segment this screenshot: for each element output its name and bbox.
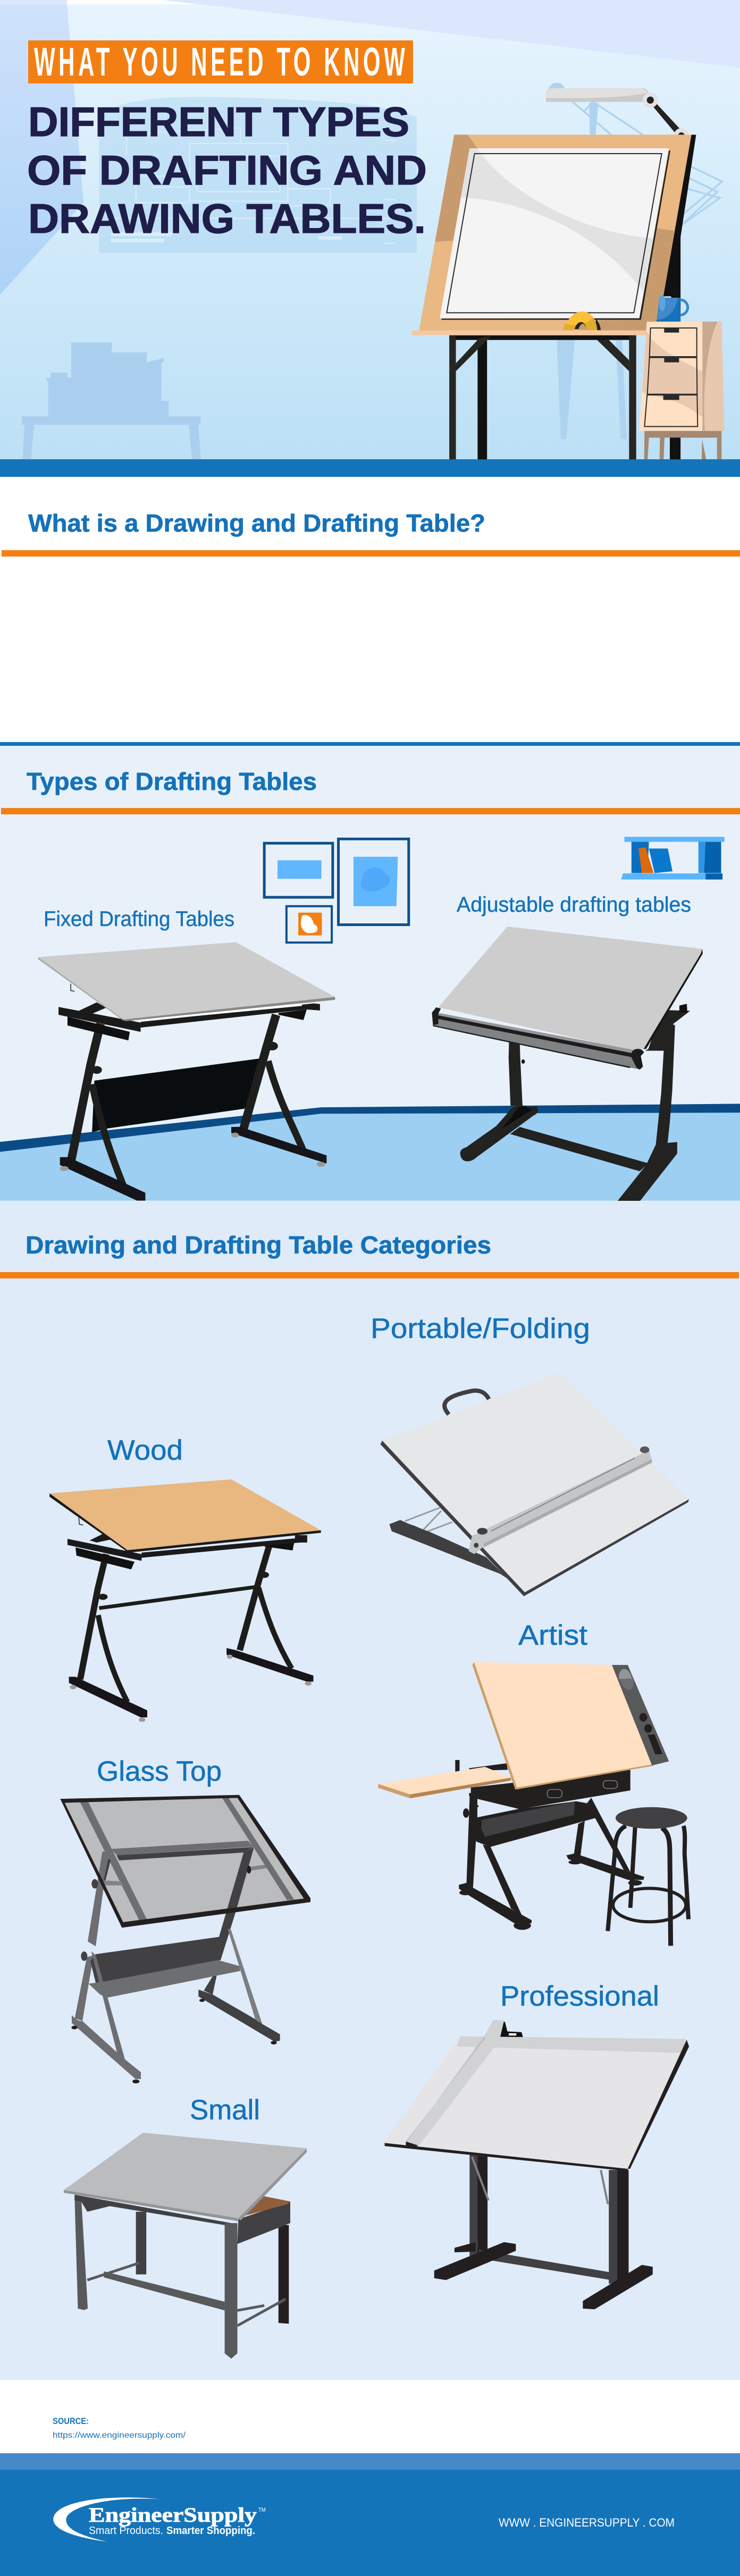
label: wood: Wood: [107, 1435, 183, 1466]
label: small: Small: [190, 2094, 260, 2126]
table legs: [449, 134, 696, 459]
banner: what you need to know: WHAT YOU NEED TO KNOW: [34, 39, 405, 84]
floor: [0, 1113, 740, 1201]
label: professional: Professional: [500, 1981, 659, 2012]
title: OF DRAFTING AND: [27, 147, 427, 193]
artist table and stool: [378, 1662, 688, 1946]
baseboard: [0, 1104, 740, 1152]
label: artist: Artist: [518, 1620, 587, 1651]
blueprint backdrop: [99, 97, 417, 252]
lamp: [546, 83, 689, 143]
title: [27, 98, 427, 242]
adjustable table: [432, 927, 703, 1201]
heading: Types of Drafting Tables: [27, 768, 317, 795]
source: https://www.engineersupply.com/: [53, 2431, 186, 2440]
label: fixed drafting tables: Fixed Drafting Tables: [44, 907, 234, 931]
title: DRAWING TABLES.: [28, 195, 426, 242]
board ledge: [412, 331, 646, 335]
professional table: [383, 2020, 689, 2309]
orange rule: [2, 550, 740, 557]
fixed table: [38, 942, 335, 1201]
logo: engineer supply: Smart Products.: [89, 2525, 163, 2537]
logo: engineer supply: EngineerSupply: [89, 2504, 257, 2527]
website: WWW . ENGINEERSUPPLY . COM: [499, 2516, 675, 2529]
framed pictures: [264, 839, 409, 942]
footer: [0, 2453, 740, 2576]
title: DIFFERENT TYPES: [28, 98, 409, 145]
small table: [64, 2133, 307, 2359]
wall shelf with books: [621, 837, 725, 880]
portable folding table: [381, 1373, 689, 1596]
drafting table illustration: [412, 83, 725, 459]
logo: engineer supply: TM: [258, 2507, 266, 2513]
source: [53, 2416, 186, 2440]
mug: [657, 295, 688, 322]
logo: engineer supply: Smarter Shopping.: [166, 2525, 255, 2537]
stool: [608, 1807, 688, 1946]
logo: engineer supply: [53, 2497, 266, 2542]
glass top table: [60, 1795, 310, 2083]
panel: hero: [0, 0, 740, 477]
section: what is a drawing and drafting table: [2, 509, 740, 557]
orange rule: [1, 808, 740, 814]
silhouette: desk with stacked items: [22, 342, 201, 459]
wood table: [49, 1479, 321, 1722]
drawing board: [412, 134, 692, 335]
background skeleton lines: [557, 103, 627, 439]
drawer cabinet: [639, 322, 725, 459]
source: SOURCE:: [53, 2416, 89, 2426]
heading: Drawing and Drafting Table Categories: [26, 1231, 491, 1259]
floor band: [0, 459, 740, 477]
protractor: [563, 312, 601, 330]
label: portable/folding: Portable/Folding: [371, 1313, 590, 1344]
orange rule: [0, 1272, 739, 1278]
heading: What is a Drawing and Drafting Table?: [28, 509, 485, 537]
section: types of drafting tables: [0, 742, 740, 1201]
label: glass top: Glass Top: [97, 1756, 222, 1787]
label: adjustable drafting tables: Adjustable drafting tables: [457, 893, 691, 916]
section: drawing and drafting table categories: [0, 1201, 740, 2380]
